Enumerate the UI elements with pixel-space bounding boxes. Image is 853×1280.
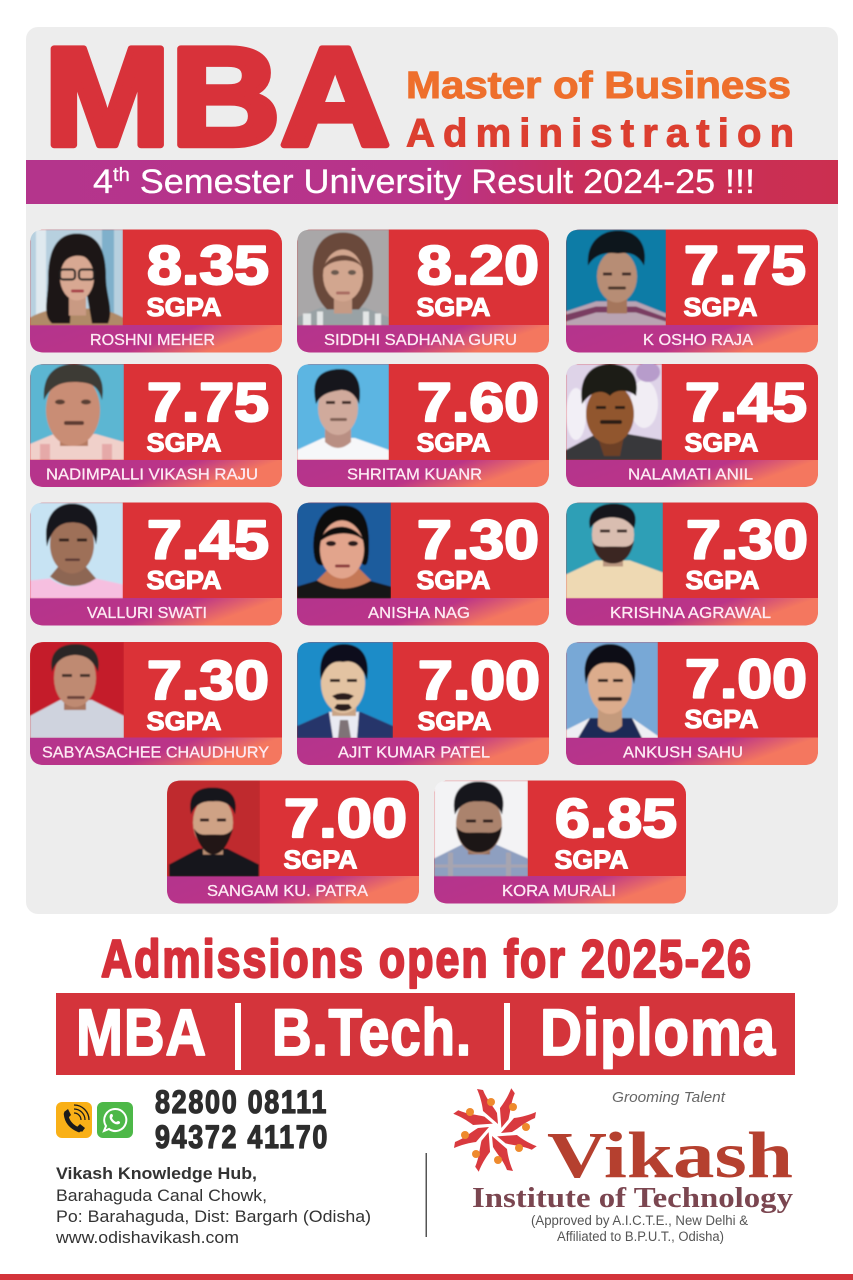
phone numbers: 82800 08111 [155,1084,328,1120]
card: Valluri Swati [30,502,282,626]
photo: Kora Murali [434,780,528,876]
SGPA label: SGPA [146,294,222,322]
logo wordmark: Institute of Technology: Institute of Technology [472,1182,794,1214]
card: Ankush Sahu [566,642,818,765]
photo: Sangam Ku. Patra [167,780,260,876]
score: 8.35 [147,234,269,296]
logo wordmark: Vikash: Vikash [547,1119,793,1192]
name: SHRITAM KUANR [347,466,482,484]
score: 7.30 [147,649,269,711]
phone numbers [155,1084,329,1155]
score: 7.45 [147,508,269,570]
score: 7.00 [418,649,540,711]
address: Po: Barahaguda, Dist: Bargarh (Odisha) [56,1207,371,1226]
tagline: Grooming Talent: Grooming Talent [612,1089,726,1106]
banner: semester result [26,160,838,204]
card: Sabyasachee Chaudhury [30,642,282,765]
SGPA label: SGPA [684,430,758,458]
score: 8.20 [417,234,539,296]
score: 7.30 [686,508,808,570]
SGPA label: SGPA [684,706,758,734]
score: 7.45 [685,371,807,433]
logo: star emblem [453,1088,537,1172]
name: VALLURI SWATI [87,605,207,622]
SGPA label: SGPA [146,430,222,458]
SGPA label: SGPA [554,846,628,874]
photo: K Osho Raja [566,230,666,326]
score: 7.75 [684,234,806,296]
card: Nalamati Anil [566,362,818,487]
card: Nadimpalli Vikash Raju [30,364,282,487]
SGPA label: SGPA [416,294,490,322]
name: ANISHA NAG [368,605,470,622]
icon: whatsapp [97,1102,133,1138]
score: 7.30 [417,508,539,570]
address: www.odishavikash.com [55,1228,239,1247]
SGPA label: SGPA [416,430,490,458]
subtitle: Master of Business Administration: Master of Business [406,65,791,107]
card: Shritam Kuanr [297,364,549,487]
background panel [26,27,838,914]
SGPA label: SGPA [146,708,222,736]
approval note: (Approved by A.I.C.T.E., New Delhi & [531,1213,748,1228]
score: 7.00 [284,787,407,849]
approval note [531,1213,748,1244]
score: 7.60 [417,371,539,433]
banner: programmes: B.Tech. [272,995,472,1069]
score: 6.85 [555,787,677,849]
photo: Siddhi Sadhana Guru [297,230,389,326]
address: Barahaguda Canal Chowk, [56,1186,267,1205]
name: AJIT KUMAR PATEL [338,744,490,762]
name: SIDDHI SADHANA GURU [324,332,517,349]
banner: programmes: MBA [76,995,207,1069]
photo: Anisha Nag [297,502,391,598]
SGPA label: SGPA [684,294,758,322]
address: Vikash Knowledge Hub, [56,1165,257,1183]
banner: semester result: Semester University Result 2024-25 !!! [130,163,755,201]
SGPA label: SGPA [418,708,492,736]
photo: Nalamati Anil [566,362,662,460]
name: KORA MURALI [502,883,616,900]
name: KRISHNA AGRAWAL [610,605,771,622]
photo: Krishna Agrawal [566,502,663,598]
photo: Shritam Kuanr [297,364,389,460]
card: Ajit Kumar Patel [297,642,549,765]
approval note: Affiliated to B.P.U.T., Odisha) [557,1229,724,1244]
card: Siddhi Sadhana Guru [297,230,549,352]
SGPA label: SGPA [284,846,358,874]
card: Roshni Meher [30,230,282,352]
SGPA label: SGPA [416,567,490,595]
banner: semester result: th [113,165,130,186]
card: Krishna Agrawal [566,502,818,626]
card: Kora Murali [434,780,686,904]
photo: Ajit Kumar Patel [297,642,393,738]
card: Sangam Ku. Patra [167,780,419,904]
banner: programmes: Diploma [540,995,776,1069]
banner: semester result: 4 [93,163,112,201]
phone numbers: 94372 41170 [155,1119,329,1155]
subtitle: Master of Business Administration [406,65,794,156]
photo: Valluri Swati [30,502,123,598]
photo: Ankush Sahu [566,642,658,738]
name: SANGAM KU. PATRA [207,883,368,900]
address [55,1165,371,1247]
photo: Nadimpalli Vikash Raju [30,364,124,460]
name: K OSHO RAJA [643,332,753,349]
title: MBA: MBA [44,18,390,175]
score: 7.00 [685,648,807,710]
name: NALAMATI ANIL [628,466,753,484]
name: NADIMPALLI VIKASH RAJU [46,466,258,484]
score: 7.75 [147,371,269,433]
name: ROSHNI MEHER [90,332,215,349]
SGPA label: SGPA [146,567,222,595]
photo: Roshni Meher [30,230,123,326]
icon: phone [56,1102,92,1138]
name: ANKUSH SAHU [623,744,743,762]
card: K Osho Raja [566,230,818,352]
SGPA label: SGPA [686,567,760,595]
name: SABYASACHEE CHAUDHURY [42,744,269,762]
card: Anisha Nag [297,502,549,626]
photo: Sabyasachee Chaudhury [30,642,124,738]
banner: programmes [56,993,795,1075]
subtitle: Master of Business Administration: Administration [406,112,794,156]
